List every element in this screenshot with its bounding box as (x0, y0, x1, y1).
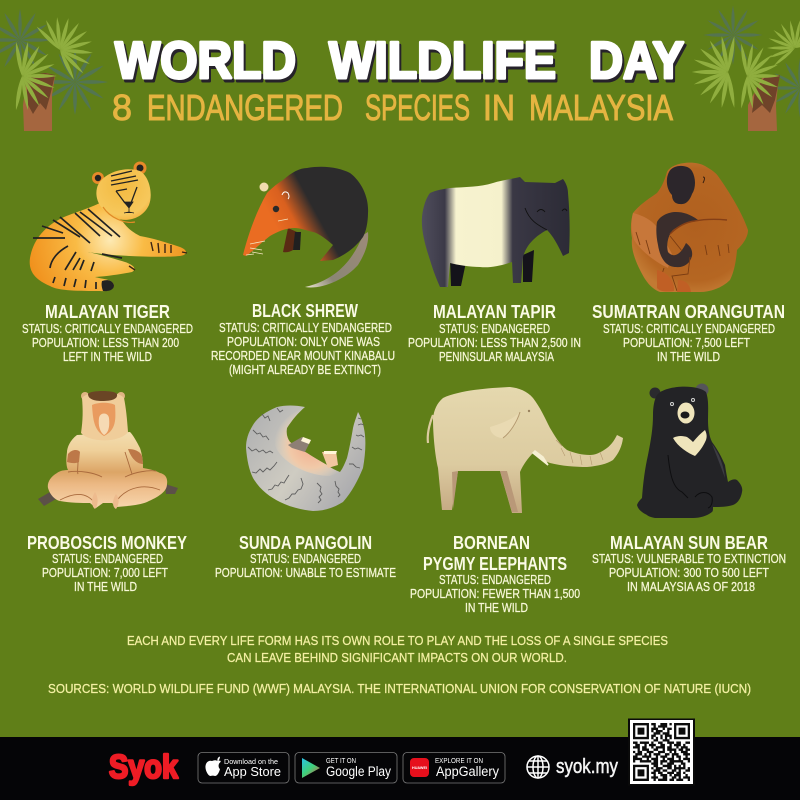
label: GET IT ON (326, 758, 356, 765)
title (115, 32, 684, 90)
species details: STATUS: ENDANGERED (250, 552, 361, 566)
icon: play triangle (302, 758, 320, 778)
species details: POPULATION: LESS THAN 2,500 IN (408, 336, 581, 350)
species details: IN THE WILD (465, 601, 528, 615)
species details (408, 322, 581, 364)
icon: AppGallery: HUAWEI (412, 766, 427, 770)
icon: right palm tree (692, 5, 800, 131)
footer bar (0, 737, 800, 800)
label (326, 758, 391, 779)
closing message: EACH AND EVERY LIFE FORM HAS ITS OWN ROLE TO PLAY AND THE LOSS OF A SINGLE SPECIES (127, 634, 668, 648)
species details: STATUS: ENDANGERED (439, 573, 551, 587)
label: Download on the (224, 757, 278, 766)
species details: POPULATION: 7,500 LEFT (623, 336, 750, 350)
badge: Google Play (295, 752, 397, 783)
species details (22, 322, 193, 364)
label: AppGallery (436, 764, 499, 779)
species name: BORNEAN (453, 533, 530, 553)
icon: tiger (30, 162, 187, 291)
icon: apple (205, 756, 221, 776)
panel: Malayan tiger (22, 162, 193, 364)
species details (410, 573, 580, 615)
subtitle: ENDANGERED (147, 87, 343, 128)
label (224, 757, 281, 779)
species details: (MIGHT ALREADY BE EXTINCT) (229, 363, 381, 377)
species details (603, 322, 775, 364)
species details: POPULATION: 300 TO 500 LEFT (609, 566, 769, 580)
icon: sun bear (637, 384, 742, 518)
species details: IN THE WILD (657, 350, 720, 364)
species name: BLACK SHREW (252, 301, 358, 321)
species details (592, 552, 786, 594)
badge: AppGallery (403, 752, 505, 783)
species details: POPULATION: 7,000 LEFT (42, 566, 168, 580)
species name: SUNDA PANGOLIN (239, 533, 372, 553)
species details: RECORDED NEAR MOUNT KINABALU (211, 349, 395, 363)
title: DAY (589, 32, 684, 90)
species details: STATUS: ENDANGERED (439, 322, 550, 336)
subtitle: SPECIES (365, 87, 470, 128)
subtitle (112, 87, 673, 128)
species name: MALAYAN SUN BEAR (610, 533, 768, 553)
title: WORLD (115, 32, 296, 90)
species name (423, 533, 567, 574)
badge: App Store (198, 752, 289, 783)
species details: STATUS: CRITICALLY ENDANGERED (219, 321, 392, 335)
icon: shrew (243, 167, 368, 288)
species name: MALAYAN TAPIR (433, 302, 556, 322)
species details (42, 552, 168, 594)
label (435, 758, 499, 779)
subtitle: IN (483, 87, 515, 128)
panel: Bornean pygmy elephants (410, 387, 623, 615)
icon: orangutan (631, 163, 748, 292)
closing message: CAN LEAVE BEHIND SIGNIFICANT IMPACTS ON OUR WORLD. (227, 651, 567, 665)
panel: Sumatran orangutan (592, 163, 785, 364)
icon: left palm tree (0, 4, 108, 131)
species details (211, 321, 395, 377)
panel: Malayan tapir (408, 177, 581, 364)
website: syok.my (556, 756, 618, 778)
species details: PENINSULAR MALAYSIA (439, 350, 555, 364)
species details: IN MALAYSIA AS OF 2018 (627, 580, 755, 594)
logo: Syok: Syok (109, 748, 179, 785)
label: Google Play (326, 764, 391, 779)
label: EXPLORE IT ON (435, 758, 483, 765)
species details: LEFT IN THE WILD (63, 350, 152, 364)
species details: STATUS: CRITICALLY ENDANGERED (22, 322, 193, 336)
panel: Proboscis monkey (27, 391, 187, 594)
panel: Malayan sun bear (592, 384, 786, 594)
species details: POPULATION: LESS THAN 200 (32, 336, 179, 350)
species name: PROBOSCIS MONKEY (27, 533, 187, 553)
closing message (127, 634, 668, 665)
icon: proboscis monkey (38, 391, 178, 509)
icon: globe (527, 756, 549, 778)
species details (215, 552, 396, 580)
icon: elephant (428, 387, 623, 513)
panel: Black shrew (211, 167, 395, 377)
species details: STATUS: ENDANGERED (52, 552, 163, 566)
label: App Store (224, 764, 281, 779)
species details: POPULATION: UNABLE TO ESTIMATE (215, 566, 396, 580)
species name: MALAYAN TIGER (45, 302, 170, 322)
panel: Sunda pangolin (215, 406, 396, 580)
subtitle: 8 (112, 87, 132, 128)
species name: PYGMY ELEPHANTS (423, 554, 567, 574)
sources: SOURCES: WORLD WILDLIFE FUND (WWF) MALAYSIA. THE INTERNATIONAL UNION FOR CONSERVATION OF NATURE (IUCN) (48, 682, 751, 696)
species details: POPULATION: ONLY ONE WAS (227, 335, 380, 349)
species details: POPULATION: FEWER THAN 1,500 (410, 587, 580, 601)
species details: IN THE WILD (74, 580, 137, 594)
subtitle: MALAYSIA (529, 87, 673, 128)
icon: pangolin (246, 406, 365, 511)
icon: tapir (422, 177, 570, 287)
QR code (628, 718, 695, 786)
title: WILDLIFE (329, 32, 556, 90)
